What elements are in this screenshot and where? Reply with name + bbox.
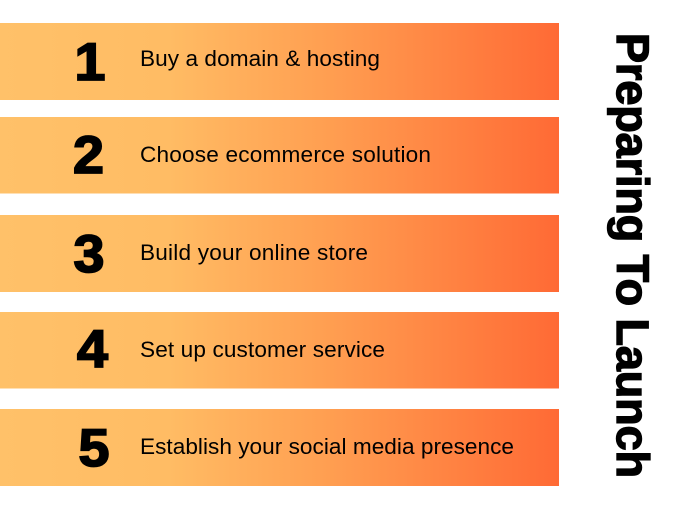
number 4: 4 [77,319,108,379]
label: step 1: Buy a domain & hosting [140,46,380,71]
number 3: 3 [74,224,104,284]
label: step 4: Set up customer service [140,337,385,362]
label: step 2: Choose ecommerce solution [140,142,431,167]
panel: step 3 [0,215,559,292]
label: step 3: Build your online store [140,240,368,265]
panel: step 2 [0,117,559,194]
panel: step 1 [0,23,559,100]
panel: step 4 [0,312,559,388]
title: Preparing To Launch [607,33,658,478]
panel: step 5 [0,409,559,486]
number 2: 2 [73,125,104,185]
number 1: 1 [75,32,105,92]
number 5: 5 [79,418,109,478]
label: step 5: Establish your social media presence [140,434,514,459]
